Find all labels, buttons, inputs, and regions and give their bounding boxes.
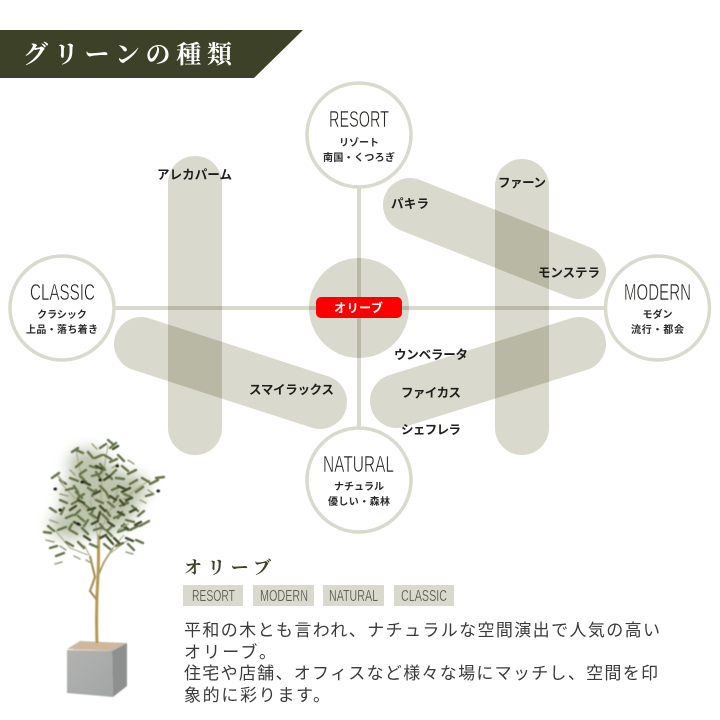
description text: 住宅や店舗、オフィスなど様々な場にマッチし、空間を印: [184, 664, 658, 683]
description text: 平和の木とも言われ、ナチュラルな空間演出で人気の高い: [184, 621, 660, 640]
pill: pachira to monstera: [410, 205, 579, 272]
tag: natural: NATURAL: [329, 588, 378, 605]
center label: olive: [316, 297, 402, 318]
foliage haze: [50, 449, 148, 539]
plant labels: ファーン: [498, 176, 546, 190]
plant labels: スマイラックス: [249, 383, 334, 397]
plant labels: ファイカス: [401, 386, 461, 400]
circle: modern: [606, 256, 710, 360]
olives: [55, 466, 158, 524]
plant labels: [157, 168, 600, 437]
title banner: [0, 30, 303, 78]
center label: olive: オリーブ: [334, 300, 383, 315]
circle: resort: 南国・くつろぎ: [323, 151, 395, 164]
plant labels: パキラ: [391, 197, 429, 211]
plant labels: シェフレラ: [401, 423, 461, 437]
trunk and branches: [44, 440, 164, 643]
style tags: [183, 585, 454, 606]
plant labels: アレカパーム: [157, 168, 232, 182]
chart: green types positioning map: [10, 83, 710, 532]
product name heading: オリーブ: [184, 554, 271, 580]
foliage: pale green: [46, 444, 154, 564]
tag: resort: RESORT: [192, 588, 235, 605]
circle: classic: クラシック: [37, 309, 87, 321]
axis lines: [115, 188, 604, 428]
tag: resort: [183, 585, 243, 606]
circle: classic: [10, 256, 114, 360]
circle: natural: ナチュラル: [334, 481, 384, 493]
foliage: mid green: [44, 440, 164, 556]
plant labels: モンステラ: [538, 266, 600, 280]
tag: modern: [253, 585, 314, 606]
circle: natural: [307, 428, 411, 532]
description text: 象的に彩ります。: [184, 686, 330, 705]
tag: natural: [323, 585, 384, 606]
description text: オリーブ。: [184, 642, 276, 662]
tag: classic: [394, 585, 454, 606]
circle: resort: リゾート: [339, 137, 379, 149]
pill: smilax: [141, 344, 320, 402]
circle: natural: NATURAL: [323, 451, 394, 477]
center circle: [309, 258, 409, 358]
pill: fern: [495, 159, 549, 455]
tag: classic: CLASSIC: [401, 588, 447, 605]
foliage: dark green: [70, 446, 141, 544]
pill: ficus group: [397, 344, 579, 401]
illustration: potted olive tree: [44, 440, 164, 697]
circle: classic: CLASSIC: [30, 279, 95, 305]
plant labels: ウンベラータ: [394, 348, 468, 362]
circle: resort: RESORT: [329, 106, 389, 132]
circle: modern: 流行・都会: [631, 323, 684, 336]
circle: resort: [307, 83, 411, 187]
pot: [67, 641, 127, 697]
description text: [184, 621, 660, 705]
circle: natural: 優しい・森林: [328, 495, 390, 508]
title banner: グリーンの種類: [23, 35, 233, 71]
circle: classic: 上品・落ち着き: [26, 323, 98, 336]
pill: areca palm: [168, 156, 222, 455]
circle: modern: モダン: [642, 308, 672, 321]
tag: modern: MODERN: [260, 588, 308, 605]
